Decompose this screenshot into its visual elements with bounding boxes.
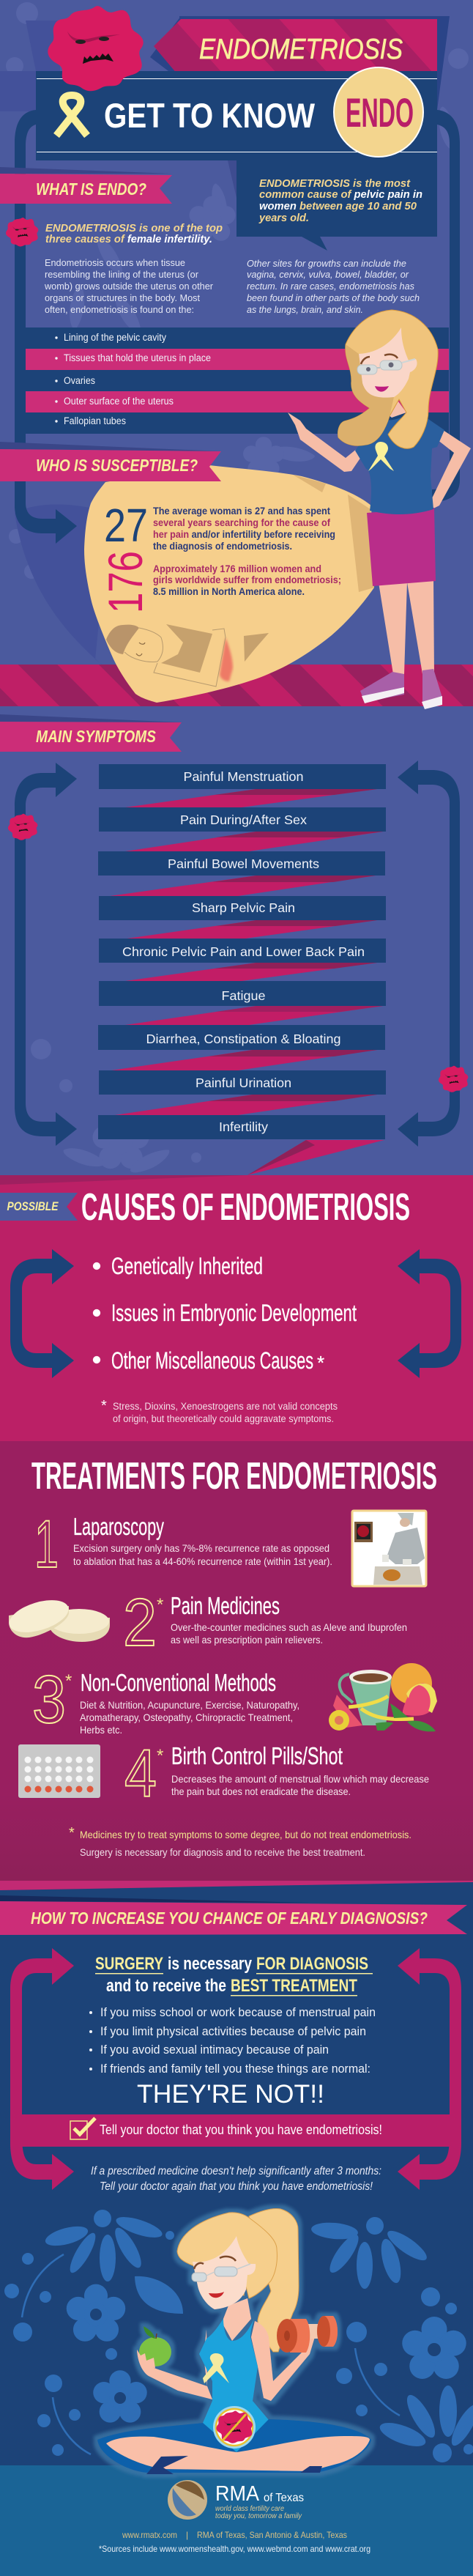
face [359, 327, 417, 401]
heading: surgery is necessary: FOR DIAGNOSIS [256, 1954, 368, 1974]
text: average woman: several years searching for the cause of [153, 517, 330, 528]
legs [379, 579, 434, 674]
treatment 3: non-conventional methods: Herbs etc. [80, 1724, 122, 1736]
arrows: causes right bracket [398, 1249, 461, 1378]
right track of section frame [432, 110, 460, 502]
treatment 1: laparoscopy [34, 1507, 426, 1586]
shirt [355, 415, 444, 514]
symptoms list: Painful Menstruation [183, 769, 303, 784]
symptoms list [98, 764, 386, 1139]
logo: RMA of Texas: today you, tomorrow a family [215, 2512, 302, 2520]
text: top three causes of infertility: ENDOMETRIOSIS is one of the top [45, 222, 223, 234]
arrows: causes left bracket [10, 1249, 74, 1378]
text: other sites for growths: been found in other parts of the body such [247, 292, 420, 303]
feet [146, 2456, 322, 2474]
list: warning signs: If you avoid sexual intimacy because of pain [100, 2043, 329, 2057]
logo: RMA of Texas: of Texas [264, 2492, 304, 2504]
list: locations of endometriosis [26, 327, 449, 434]
text: other sites for growths: rectum. In rare cases, endometriosis has [247, 281, 414, 292]
heading: surgery is necessary: is necessary [168, 1954, 253, 1974]
symptoms list: Sharp Pelvic Pain [192, 900, 295, 915]
hair fringe shadow [338, 344, 394, 445]
list: causes: Other Miscellaneous Causes [111, 1347, 313, 1374]
callout: they're not: THEY'RE NOT!! [137, 2080, 324, 2109]
panel: early diagnosis [0, 1881, 473, 2468]
text: prescribed medicine note [91, 2165, 381, 2193]
zigzag connectors between symptoms [110, 789, 383, 1115]
list: causes: Issues in Embryonic Development [111, 1300, 357, 1326]
yoga glasses and features [192, 2257, 250, 2298]
illustration: woman lying in pain [106, 624, 269, 686]
heading: surgery is necessary: and to receive the [106, 1976, 226, 1996]
endo badge [334, 67, 423, 157]
text: 176 million women [153, 563, 341, 597]
treatment 2: pain medicines: * [157, 1595, 163, 1615]
icon: angry endometriosis monster [48, 6, 144, 91]
text: endometriosis description: often, endometriosis is found on the: [45, 304, 194, 315]
left track of section frame [15, 110, 77, 544]
illustration: standing doctor character [288, 310, 471, 709]
treatment 4: birth control pills: the pain but does not eradicate the disease. [171, 1785, 351, 1797]
treatment 4: birth control pills: * [157, 1746, 163, 1766]
note: medicines versus surgery: Surgery is necessary for diagnosis and to receive the best treatment. [80, 1846, 365, 1858]
ribbon: what is endo [0, 167, 172, 204]
shoes [360, 669, 442, 709]
decorative background flowers [6, 2, 469, 1177]
treatment 3: non-conventional methods: Aromatherapy, Osteopathy, Chiropractic Treatment, [80, 1711, 293, 1723]
callout: most common cause of pelvic pain: years old. [258, 212, 309, 224]
neck [222, 2298, 251, 2341]
footer website and location: www.rmatx.com [122, 2530, 177, 2540]
note: medicines versus surgery: Medicines try to treat symptoms to some degree, but do not treat endometriosis. [80, 1829, 411, 1840]
ribbon: what is endo: WHAT IS ENDO? [36, 179, 146, 199]
image: surgeon illustration [352, 1511, 426, 1586]
callout: most common cause of pelvic pain: common cause of pelvic pain in [259, 188, 422, 201]
symptoms list: Painful Bowel Movements [168, 856, 319, 871]
footer sources: *Sources include www.womenshealth.gov, www.webmd.com and www.crat.org [99, 2544, 370, 2554]
list: locations of endometriosis: Tissues that hold the uterus in place [64, 352, 211, 363]
striped floor band [0, 665, 473, 706]
list: locations of endometriosis: Outer surface of the uterus [64, 396, 174, 407]
arms [288, 412, 471, 509]
treatment 3: non-conventional methods: 3 [32, 1662, 66, 1737]
arrow: symptoms left bracket [15, 763, 77, 1146]
panel: treatments [0, 1441, 473, 1881]
endo badge: ENDO [346, 89, 414, 136]
neck [382, 392, 406, 418]
treatment 4: birth control pills [18, 1736, 429, 1811]
callout: most common cause of pelvic pain: women between age 10 and 50 [259, 200, 417, 212]
ribbon: main symptoms [0, 714, 182, 752]
treatment 4: birth control pills: Birth Control Pills/Shot [171, 1742, 343, 1769]
text: average woman: her pain and/or infertility before receiving [153, 528, 335, 540]
treatment 3: non-conventional methods: Non-Conventional Methods [81, 1669, 276, 1696]
apple [137, 2326, 171, 2368]
purple background section [0, 0, 473, 1175]
dumbbell [277, 2316, 338, 2353]
treatment 3: non-conventional methods: * [65, 1671, 72, 1691]
logo: RMA of Texas [168, 2480, 304, 2520]
text: endometriosis description: womb) grows outside the uterus on other [44, 281, 214, 292]
text: other sites for growths: Other sites for growths can include the [247, 258, 406, 269]
footer website and location: | [186, 2530, 188, 2540]
arms [137, 2321, 316, 2401]
text: endometriosis description: Endometriosis occurs when tissue [45, 257, 185, 268]
treatment 2: pain medicines: as well as prescription pain relievers. [171, 1634, 323, 1646]
title: endometriosis: ENDOMETRIOSIS [199, 34, 403, 65]
text: 176 million women: girls worldwide suffer from endometriosis; [153, 574, 341, 585]
heading: surgery is necessary: BEST TREATMENT [231, 1976, 357, 1996]
ribbon: who is susceptible [0, 442, 221, 481]
list: warning signs: If you miss school or work because of menstrual pain [100, 2005, 376, 2019]
navy title box [36, 67, 437, 160]
treatment 4: birth control pills: 4 [124, 1736, 157, 1811]
symptoms list: Diarrhea, Constipation & Bloating [146, 1032, 341, 1046]
text: 176 million women: Approximately 176 million women and [153, 563, 321, 574]
list: warning signs: If friends and family tell you these things are normal: [100, 2062, 370, 2076]
skirt [367, 508, 436, 586]
note: medicines versus surgery [69, 1825, 411, 1858]
treatment 3: non-conventional methods: Diet & Nutrition, Acupuncture, Exercise, Naturopathy, [80, 1699, 299, 1711]
ponytail [249, 2209, 299, 2352]
number 176: 176 [98, 551, 152, 613]
image: birth control pack [18, 1744, 100, 1798]
awareness ribbon [56, 95, 87, 136]
text: other sites for growths: as the lungs, brain, and skin. [247, 304, 363, 315]
treatment 2: pain medicines: 2 [123, 1585, 157, 1660]
symptoms list: Painful Urination [195, 1076, 291, 1090]
header ribbon [150, 16, 450, 110]
symptoms list: Infertility [219, 1119, 268, 1134]
heading: get to know: GET TO KNOW [104, 96, 316, 135]
callout: most common cause of pelvic pain [228, 160, 437, 251]
icon: checkbox [70, 2118, 95, 2139]
treatment 4: birth control pills: Decreases the amount of menstrual flow which may decrease [171, 1773, 429, 1785]
list: locations of endometriosis: Lining of the pelvic cavity [64, 332, 166, 343]
number 27: 27 [104, 499, 148, 552]
footer band [0, 2465, 473, 2576]
logo: RMA of Texas: RMA [215, 2482, 260, 2506]
symptoms list: Chronic Pelvic Pain and Lower Back Pain [122, 944, 365, 959]
text: top three causes of infertility: three causes of female infertility. [45, 233, 212, 245]
ribbon: who is susceptible: WHO IS SUSCEPTIBLE? [36, 456, 198, 475]
footnote: stress and dioxins: * [101, 1398, 107, 1414]
list: locations of endometriosis: Fallopian tubes [64, 415, 126, 426]
heading: surgery is necessary: SURGERY [95, 1954, 163, 1974]
tank top [199, 2319, 269, 2452]
arrow: symptoms right bracket [398, 760, 460, 1147]
decorative blue flowers [4, 2210, 473, 2462]
no-endometriosis badge [213, 2406, 256, 2449]
text: 176 million women: 8.5 million in North America alone. [153, 585, 305, 597]
shorts and crossed legs [97, 2419, 371, 2473]
illustration: yoga woman [97, 2209, 371, 2474]
treatment 2: pain medicines [5, 1585, 407, 1660]
text: average woman: the diagnosis of endometriosis. [153, 540, 292, 552]
list: locations of endometriosis: Ovaries [64, 375, 95, 386]
icon: small monster [6, 218, 38, 246]
text: endometriosis description: resembling the lining of the uterus (or [45, 269, 199, 280]
panel: causes of endometriosis [0, 1175, 473, 1441]
ribbon: main symptoms: MAIN SYMPTOMS [36, 727, 157, 746]
treatment 3: non-conventional methods [32, 1662, 437, 1737]
hair [338, 310, 438, 448]
symptoms list: Fatigue [221, 988, 265, 1003]
treatment 1: laparoscopy: to ablation that has a 44-60% recurrence rate (within 1st year). [73, 1555, 332, 1567]
arrows: right bracket [398, 1948, 461, 2190]
image: pills [5, 1594, 110, 1642]
footer website and location [122, 2530, 347, 2540]
logo: RMA of Texas: world class fertility care [215, 2504, 284, 2513]
list: causes: * [317, 1352, 324, 1374]
list: warning signs: If you limit physical activities because of pelvic pain [100, 2024, 366, 2038]
treatment 1: laparoscopy: Laparoscopy [73, 1513, 164, 1540]
ribbon: possible [0, 1193, 78, 1221]
footnote: stress and dioxins: of origin, but theoretically could aggravate symptoms. [113, 1413, 334, 1424]
band: tell your doctor: Tell your doctor that you think you have endometriosis! [100, 2122, 382, 2137]
glasses and features [357, 355, 415, 392]
footnote: stress and dioxins [101, 1398, 338, 1424]
footer website and location: RMA of Texas, San Antonio & Austin, Texas [197, 2530, 347, 2540]
icon: monster on left track [8, 814, 37, 840]
symptoms list: Pain During/After Sex [180, 813, 307, 827]
arrows: left bracket [10, 1948, 74, 2190]
text: top three causes of infertility [45, 222, 223, 245]
treatment 2: pain medicines: Pain Medicines [171, 1592, 280, 1619]
shirt ribbon [368, 442, 394, 471]
treatment 2: pain medicines: Over-the-counter medicines such as Aleve and Ibuprofen [171, 1621, 407, 1633]
text: average woman: The average woman is 27 and has spent [153, 505, 330, 517]
connector down to causes section [247, 1140, 384, 1175]
ribbon: how to increase your chance [0, 1901, 467, 1935]
heading: surgery is necessary [95, 1954, 373, 1996]
note: medicines versus surgery: * [69, 1825, 75, 1841]
footnote: stress and dioxins: Stress, Dioxins, Xenoestrogens are not valid concepts [113, 1401, 338, 1412]
hair and face [177, 2213, 277, 2298]
icon: monster on right track [439, 1066, 468, 1092]
treatment 1: laparoscopy: Excision surgery only has 7%-8% recurrence rate as opposed [73, 1542, 329, 1554]
text: other sites for growths: vagina, cervix, vulva, bowel, bladder, or [247, 269, 409, 280]
image: tea, fruit and tape measure [329, 1663, 437, 1731]
list: causes [93, 1253, 357, 1374]
text: average woman [153, 505, 335, 552]
list: warning signs [89, 2005, 376, 2076]
dark background shadows [0, 21, 154, 703]
ribbon: possible: POSSIBLE [7, 1199, 59, 1213]
treatment 1: laparoscopy: 1 [34, 1507, 59, 1582]
text: prescribed medicine note: Tell your doctor again that you think you have endometriosis! [100, 2180, 373, 2193]
text: endometriosis description [44, 257, 214, 315]
callout: most common cause of pelvic pain: ENDOMETRIOSIS is the most [259, 177, 411, 190]
band: tell your doctor [22, 2114, 450, 2147]
text: prescribed medicine note: If a prescribed medicine doesn't help significantly after 3 months: [91, 2165, 381, 2177]
text: endometriosis description: organs or structures in the body. Most [45, 292, 200, 303]
tank ribbon [203, 2353, 229, 2383]
text: other sites for growths [247, 258, 420, 315]
list: causes: Genetically Inherited [111, 1253, 263, 1279]
